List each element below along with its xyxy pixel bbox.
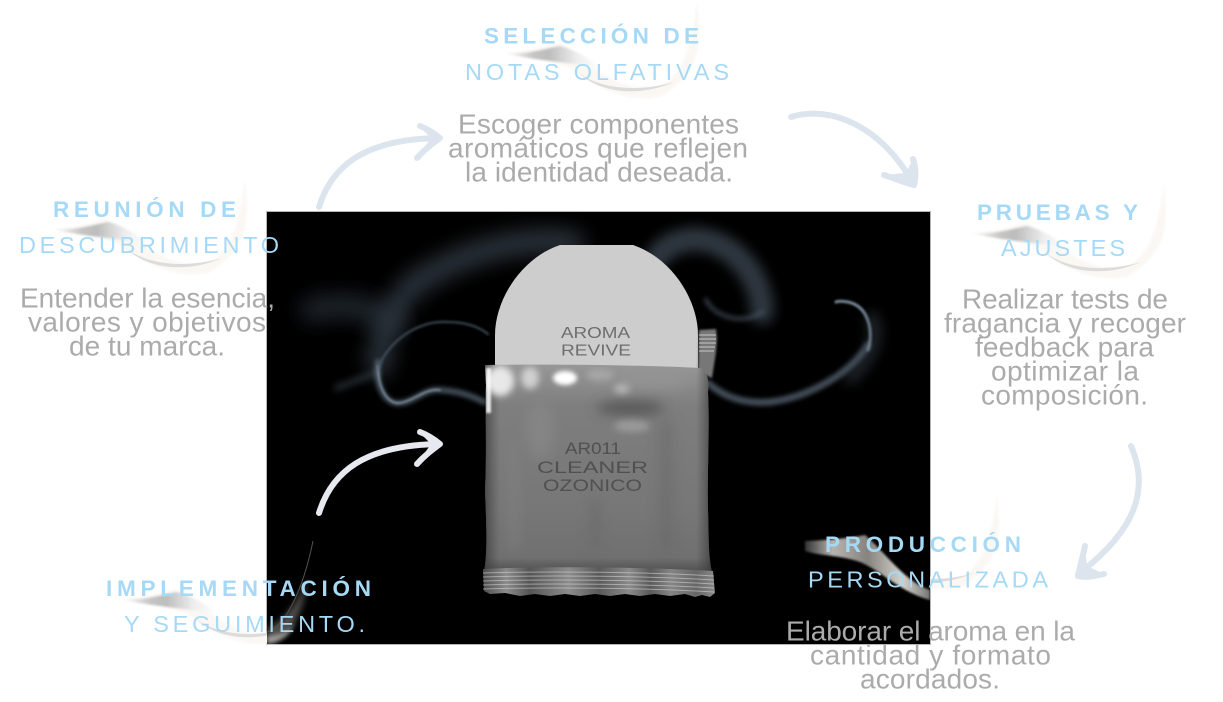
heading: SELECCIÓN DE [484, 24, 699, 48]
pouch text line 2: CLEANER [537, 458, 648, 477]
product: lid circle [495, 245, 698, 368]
subheading: PERSONALIZADA [808, 566, 1048, 592]
pouch text: AR011 [565, 439, 621, 458]
smoke [312, 239, 875, 403]
description: Realizar tests de [962, 284, 1168, 314]
description: Elaborar el aroma en la [786, 616, 1075, 646]
product: pouch [483, 365, 715, 597]
pouch highlights [485, 364, 669, 450]
description [448, 108, 748, 188]
description: la identidad deseada. [465, 156, 733, 188]
description: feedback para [975, 332, 1154, 362]
description: Entender la esencia, [20, 282, 275, 314]
heading: IMPLEMENTACIÓN [106, 576, 371, 601]
description: composición. [981, 380, 1148, 410]
step: reunión de descubrimiento [19, 197, 279, 362]
heading: PRODUCCIÓN [825, 532, 1021, 557]
description: acordados. [860, 664, 1000, 694]
step: pruebas y ajustes [944, 200, 1186, 410]
subheading: Y SEGUIMIENTO. [124, 611, 365, 637]
arrow: implementación to reunión area [319, 432, 443, 513]
description: Escoger componentes [458, 108, 739, 140]
description: valores y objetivos [28, 306, 266, 338]
lid text line 2: REVIVE [561, 342, 631, 360]
decorative swoosh: selección [505, 0, 699, 98]
decorative swoosh: implementación (over dark and light) [122, 541, 316, 644]
description: fragancia y recoger [944, 308, 1186, 338]
image panel: black product photo [266, 212, 930, 644]
decorative swoosh: producción (over dark and light) [804, 504, 998, 601]
step: selección de notas olfativas [448, 24, 748, 188]
pouch body [484, 365, 712, 572]
arrow: selección to pruebas [791, 114, 916, 188]
subheading: NOTAS OLFATIVAS [465, 59, 729, 85]
step: producción personalizada [786, 532, 1075, 694]
description: de tu marca. [69, 330, 225, 362]
pouch bottom crimp [483, 567, 715, 597]
decorative swoosh: pruebas [972, 180, 1166, 278]
subheading: AJUSTES [1001, 235, 1125, 261]
description: aromáticos que reflejen [448, 132, 748, 164]
product: side crimp [698, 329, 717, 378]
description [944, 284, 1186, 410]
heading: REUNIÓN DE [53, 197, 236, 222]
decorative swoosh: reunión [53, 176, 247, 274]
description: cantidad y formato [810, 640, 1051, 670]
subheading: DESCUBRIMIENTO [19, 232, 279, 258]
lid disc [495, 245, 698, 368]
heading: PRUEBAS Y [977, 200, 1138, 225]
step: implementación y seguimiento [106, 576, 371, 637]
arrow: pruebas to producción [1076, 446, 1139, 579]
arrow: reunión to selección [319, 126, 443, 207]
lid text: AROMA [561, 325, 630, 342]
description [786, 616, 1075, 694]
description [20, 282, 275, 362]
pouch text line 3: OZONICO [543, 476, 642, 495]
description: optimizar la [991, 356, 1139, 386]
